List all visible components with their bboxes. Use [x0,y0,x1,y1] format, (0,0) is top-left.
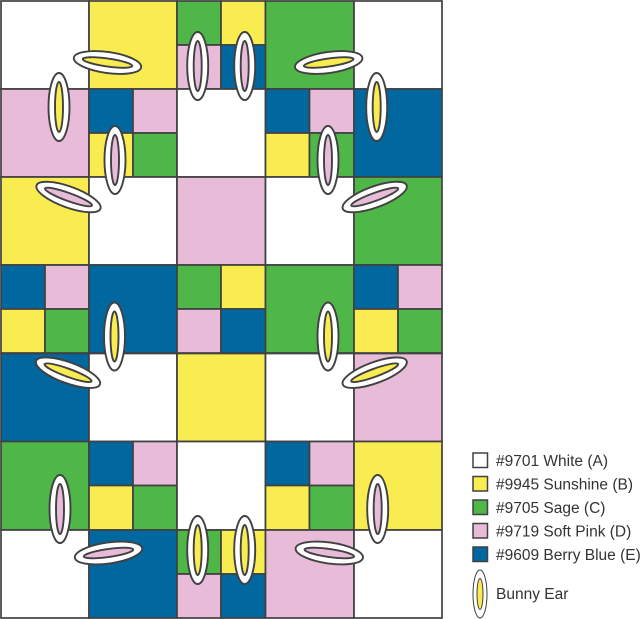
legend item: sunshine: #9945 Sunshine (B) [496,476,633,494]
bunny ear: upper left vertical pink [104,126,126,194]
bunny ear: top right vertical yellow [366,73,387,141]
bunny ear: top left vertical yellow [48,73,70,141]
bunny ear: bottom right tilted pink [294,538,364,568]
legend item: white: #9701 White (A) [496,453,608,470]
bunny ear: middle right tilted yellow [339,351,410,394]
legend item: bunny ear: Bunny Ear [496,586,568,603]
bunny ear: lower left vertical pink [50,475,70,543]
bunny ear: lower right vertical pink [367,475,388,543]
legend item: berry blue: #9609 Berry Blue (E) [496,547,641,564]
bunny ear: bottom center right yellow [234,516,255,584]
bunny ear: top center left pink [187,32,208,100]
bunny ear: middle right vertical yellow [318,302,338,370]
bunny ear: top center right pink [234,32,255,100]
bunny ear: upper right vertical pink [318,126,338,194]
bunny ear: top left tilted yellow [72,47,143,78]
bunny ear: top right tilted yellow [294,47,364,78]
legend item: soft pink: #9719 Soft Pink (D) [496,524,631,540]
quilt grid [1,1,442,618]
bunny ear: bottom left tilted pink [73,538,144,568]
bunny ear: middle left tilted yellow [32,351,104,394]
bunny ear: upper right tilted pink [339,176,410,218]
bunny ear: upper left tilted pink [33,176,104,218]
legend item: bunny ear [473,570,568,618]
legend [473,453,641,618]
bunny ear: middle left vertical yellow [104,302,125,370]
legend item: sage: #9705 Sage (C) [496,500,605,517]
bunny ear: bottom center left yellow [187,516,208,584]
